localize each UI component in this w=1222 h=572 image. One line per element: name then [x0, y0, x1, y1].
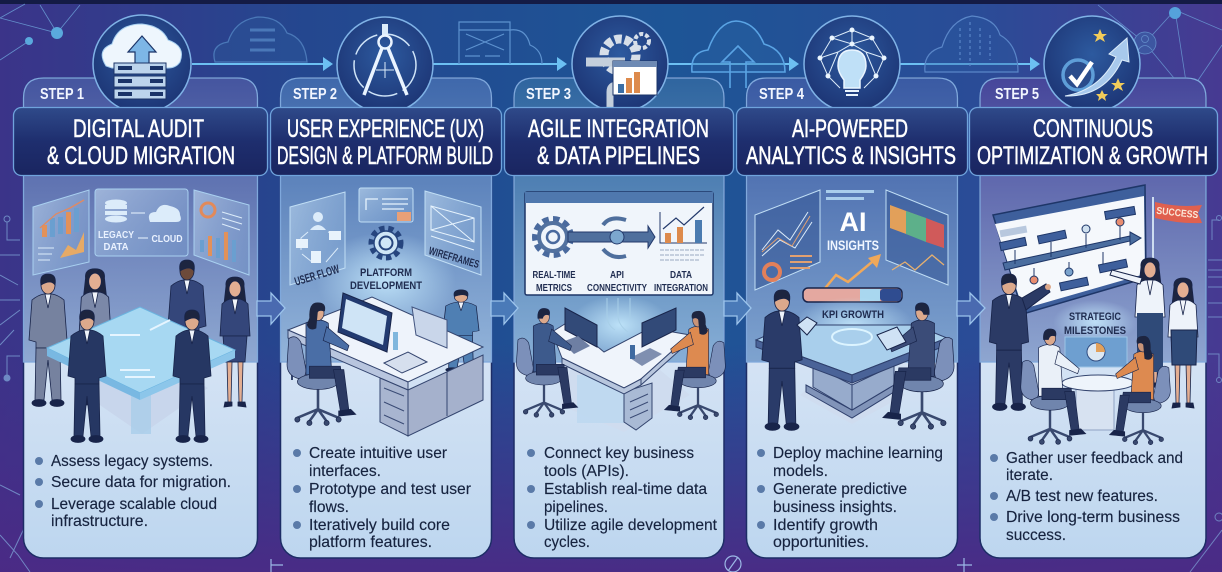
title bar: & DATA PIPELINES	[537, 142, 700, 170]
cloud outline: code	[925, 16, 1018, 72]
network decoration: top left	[0, 4, 80, 60]
timeline board and success flag	[993, 185, 1202, 314]
panel: step 3	[504, 16, 734, 558]
bullet list: interfaces.	[309, 463, 381, 480]
bullet list: tools (APIs).	[544, 463, 629, 480]
bullet list: opportunities.	[773, 534, 869, 551]
connector line with arrows across the top	[192, 57, 1040, 71]
holographic screens: DATA	[104, 242, 128, 253]
icon circle: checkmark and growth arrow	[1044, 16, 1140, 112]
strategy team at round table: MILESTONES	[1064, 325, 1126, 337]
panel: step 5	[970, 16, 1218, 558]
title bar	[14, 108, 268, 176]
icon circle: lightbulb neural network	[804, 16, 900, 112]
bullet list: A/B test new features.	[1006, 488, 1158, 505]
bullet list: infrastructure.	[51, 513, 148, 530]
panel 5 card	[980, 78, 1206, 558]
user flow, wireframes and platform screens: WIREFRAMES	[427, 245, 480, 271]
bullet list: flows.	[309, 499, 349, 516]
bullet list: Create intuitive user	[309, 445, 448, 462]
AI insights screens and KPI bar	[755, 190, 948, 353]
AI insights screens and KPI bar: INSIGHTS	[827, 237, 879, 253]
title bar	[504, 108, 734, 176]
arrow: step 3 to step 4	[724, 293, 751, 324]
developers at L-shaped desk	[516, 295, 725, 432]
dashboard window: metrics, API, integration: METRICS	[536, 283, 572, 294]
holographic screens: CLOUD	[152, 234, 182, 245]
title bar: AI-POWERED	[792, 115, 908, 143]
title bar: CONTINUOUS	[1033, 115, 1153, 143]
title bar	[970, 108, 1218, 176]
step 3 label: STEP 3	[526, 86, 571, 103]
title bar	[270, 108, 502, 176]
title bar: USER EXPERIENCE (UX)	[287, 115, 484, 143]
strategy team at round table	[989, 258, 1198, 445]
arrow: step 2 to step 3	[491, 293, 518, 324]
bullet list: Secure data for migration.	[51, 474, 231, 491]
timeline board and success flag: SUCCESS	[1156, 206, 1199, 221]
bullet list: Iteratively build core	[309, 517, 450, 534]
title bar: & CLOUD MIGRATION	[47, 142, 235, 170]
dashboard window: metrics, API, integration: CONNECTIVITY	[587, 283, 647, 294]
title bar: DESIGN & PLATFORM BUILD	[277, 142, 493, 170]
title bar: ANALYTICS & INSIGHTS	[746, 142, 956, 170]
icon circle: drafting compass	[337, 17, 433, 113]
title bar: DIGITAL AUDIT	[73, 115, 204, 143]
step 1 label: STEP 1	[40, 86, 84, 103]
bullet list: models.	[773, 463, 828, 480]
user flow, wireframes and platform screens: PLATFORM	[360, 267, 412, 279]
bullet list: Utilize agile development	[544, 517, 718, 534]
user flow, wireframes and platform screens: USER FLOW	[293, 262, 341, 289]
cloud outline: server	[214, 17, 307, 62]
bullet list: business insights.	[773, 499, 897, 516]
panel 3 card	[514, 78, 724, 558]
circuit decoration: right	[1190, 216, 1222, 572]
panel: step 2	[270, 17, 502, 558]
AI insights screens and KPI bar: KPI GROWTH	[822, 309, 884, 321]
circuit decoration: left	[0, 216, 30, 572]
dashboard window: metrics, API, integration: API	[610, 270, 624, 281]
strategy team at round table: STRATEGIC	[1069, 311, 1121, 323]
team around the table	[29, 260, 250, 442]
panel 4 card	[746, 78, 958, 558]
dashboard window: metrics, API, integration: INTEGRATION	[654, 283, 708, 294]
holographic screens: LEGACY	[98, 230, 134, 241]
bullet list	[527, 445, 718, 551]
title bar: AGILE INTEGRATION	[528, 115, 709, 143]
dashboard window: metrics, API, integration: DATA	[670, 270, 692, 281]
step 2 label: STEP 2	[293, 86, 337, 103]
network decoration: top right	[1098, 5, 1222, 95]
bullet list: Prototype and test user	[309, 481, 472, 498]
sparkle decorations along the bottom	[271, 556, 972, 572]
bullet list: success.	[1006, 527, 1066, 544]
bullet list: Establish real-time data	[544, 481, 707, 498]
panel: step 1	[14, 15, 268, 558]
bullet list: Drive long-term business	[1006, 509, 1180, 526]
cloud outline: upload	[692, 21, 785, 88]
bullet list	[990, 450, 1183, 544]
dashboard window: metrics, API, integration: REAL-TIME	[532, 270, 576, 281]
panel 1 card	[24, 78, 258, 558]
bullet list: Assess legacy systems.	[51, 453, 213, 470]
icon circle: gears and pipes	[572, 16, 668, 112]
step 5 label: STEP 5	[995, 86, 1039, 103]
wireframe window outline	[459, 22, 542, 64]
bullet list: pipelines.	[544, 499, 608, 516]
bullet list: Leverage scalable cloud	[51, 496, 217, 513]
panel 2 card	[280, 78, 492, 558]
bullet list	[757, 445, 943, 551]
AI insights screens and KPI bar: AI	[840, 207, 866, 237]
user flow, wireframes and platform screens	[290, 188, 481, 328]
holographic screens	[33, 189, 249, 275]
bullet list: Generate predictive	[773, 481, 907, 498]
analysts around the hologram table	[756, 290, 954, 430]
user flow, wireframes and platform screens: DEVELOPMENT	[350, 280, 422, 292]
step 4 label: STEP 4	[759, 86, 804, 103]
bullet list	[293, 445, 472, 551]
arrow: step 4 to step 5	[957, 293, 985, 324]
panel: step 4	[736, 16, 968, 558]
bullet list: iterate.	[1006, 467, 1053, 484]
bullet list: Gather user feedback and	[1006, 450, 1183, 467]
arrow: step 1 to step 2	[257, 293, 285, 324]
bullet list: platform features.	[309, 534, 432, 551]
title bar	[736, 108, 968, 176]
bullet list	[35, 453, 231, 530]
bullet list: Deploy machine learning	[773, 445, 943, 462]
bullet list: cycles.	[544, 534, 590, 551]
desk with two designers	[287, 290, 483, 436]
icon circle: cloud migration	[93, 15, 191, 113]
bullet list: Identify growth	[773, 517, 878, 534]
bullet list: Connect key business	[544, 445, 694, 462]
dashboard window: metrics, API, integration	[525, 192, 713, 295]
